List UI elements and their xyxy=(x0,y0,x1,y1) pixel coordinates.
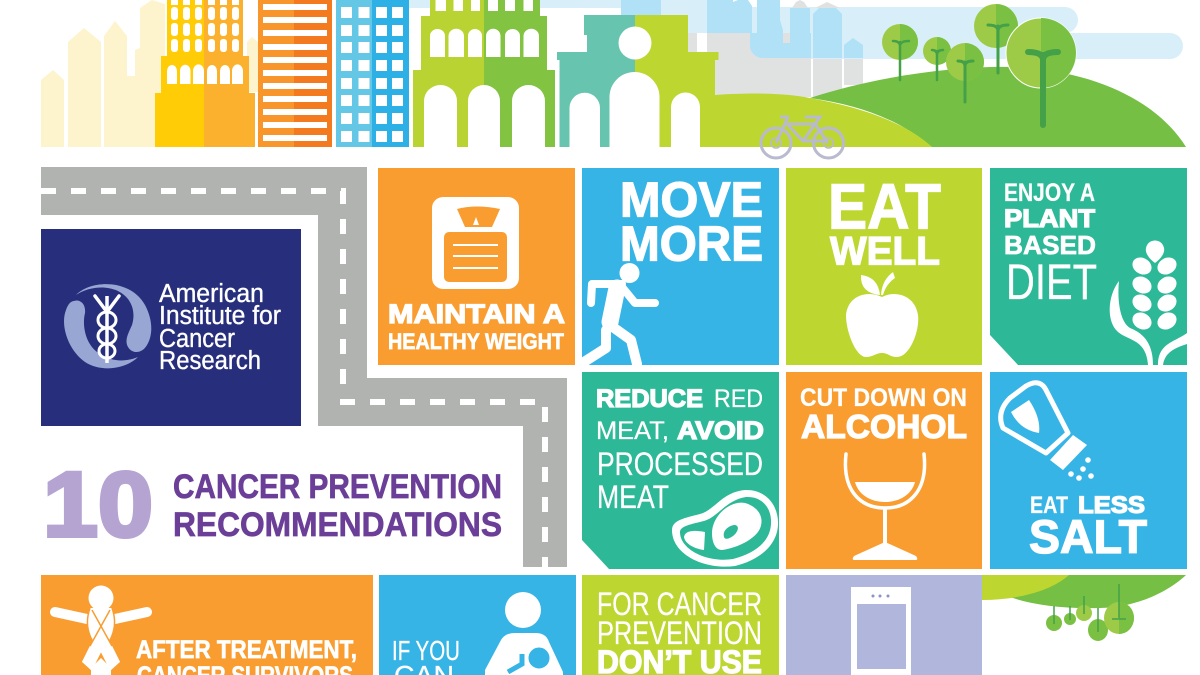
icon: wine glass xyxy=(845,454,925,560)
label: HEALTHY WEIGHT xyxy=(388,329,564,354)
organisation name: Cancer xyxy=(159,325,235,353)
label: IF YOU xyxy=(392,635,460,666)
icon: ribbon figure xyxy=(55,586,147,675)
yellow tower xyxy=(155,0,255,147)
label: REDUCE xyxy=(596,385,703,413)
cream background buildings xyxy=(41,0,258,147)
icon: smartphone xyxy=(851,587,911,675)
label xyxy=(392,635,460,675)
label: EAT xyxy=(828,170,941,242)
label: BASED xyxy=(1004,230,1096,260)
icon: runner xyxy=(584,263,655,364)
label: ALCOHOL xyxy=(801,408,967,445)
organisation name: Institute for xyxy=(159,302,281,330)
label: PREVENTION xyxy=(597,615,762,651)
label: PROCESSED xyxy=(597,446,763,482)
organisation name xyxy=(159,280,281,375)
panel: cut down on alcohol xyxy=(786,372,982,569)
label: LESS xyxy=(1078,492,1145,519)
label: SALT xyxy=(1029,510,1147,563)
label: AVOID xyxy=(677,417,764,445)
trees on the hill xyxy=(882,4,1076,125)
panel: for cancer prevention don't use xyxy=(582,575,779,675)
green hills xyxy=(700,67,1186,147)
icon: nursing mother xyxy=(485,592,563,675)
panel: American Institute for Cancer Research logo xyxy=(41,229,301,426)
panel: move more xyxy=(582,168,779,365)
label: ENJOY A xyxy=(1004,179,1095,207)
label: MORE xyxy=(620,218,763,272)
label: CUT DOWN ON xyxy=(800,384,967,412)
label xyxy=(1004,179,1097,310)
label: MOVE xyxy=(620,174,763,228)
label xyxy=(828,170,941,274)
orange striped building xyxy=(258,0,332,147)
label: MAINTAIN A xyxy=(388,299,565,329)
road xyxy=(41,167,567,567)
label xyxy=(136,636,357,675)
label xyxy=(597,586,762,675)
heading: 10 cancer prevention recommendations: CANCER PREVENTION xyxy=(173,468,502,506)
label: EAT xyxy=(1030,492,1068,519)
label xyxy=(388,299,565,354)
reflected hills and trees xyxy=(982,575,1186,641)
label: RED xyxy=(714,385,763,413)
panel: maintain a healthy weight xyxy=(378,168,575,365)
panel: eat well xyxy=(786,168,982,365)
label: MEAT, xyxy=(596,417,669,445)
icon: circular swoosh emblem xyxy=(64,284,151,368)
teal and lime station building xyxy=(557,15,718,147)
icon: salt shaker xyxy=(1001,383,1094,481)
organisation name: American xyxy=(159,280,264,308)
label xyxy=(800,384,967,445)
label: DIET xyxy=(1006,254,1097,310)
icon: bicycle xyxy=(761,117,844,158)
icon: bathroom scale xyxy=(432,197,519,289)
panel: phone and screens xyxy=(786,575,982,675)
icon: steak xyxy=(672,490,778,567)
heading: 10 cancer prevention recommendations: 10 xyxy=(43,454,153,556)
panel: after treatment, cancer survivors xyxy=(41,575,373,675)
label xyxy=(620,174,763,272)
icon: wheat xyxy=(1110,240,1187,365)
panel: reduce red meat, avoid processed meat xyxy=(582,372,779,569)
green arched building xyxy=(413,0,555,147)
organisation name: Research xyxy=(159,347,261,375)
icon: apple xyxy=(846,272,918,357)
label: AFTER TREATMENT, xyxy=(136,636,357,664)
background skyline and clouds xyxy=(409,0,1183,97)
panel: if you can breastfeed xyxy=(379,575,576,675)
heading: 10 cancer prevention recommendations xyxy=(43,454,502,556)
panel: eat less salt xyxy=(990,372,1187,569)
label: FOR CANCER xyxy=(597,586,762,622)
label: PLANT xyxy=(1004,205,1095,233)
label: WELL xyxy=(830,230,940,274)
label: MEAT xyxy=(597,479,669,515)
heading: 10 cancer prevention recommendations: RECOMMENDATIONS xyxy=(173,506,502,544)
blue windowed building xyxy=(336,0,409,147)
label xyxy=(596,385,764,515)
panel: enjoy a plant based diet xyxy=(990,168,1187,365)
